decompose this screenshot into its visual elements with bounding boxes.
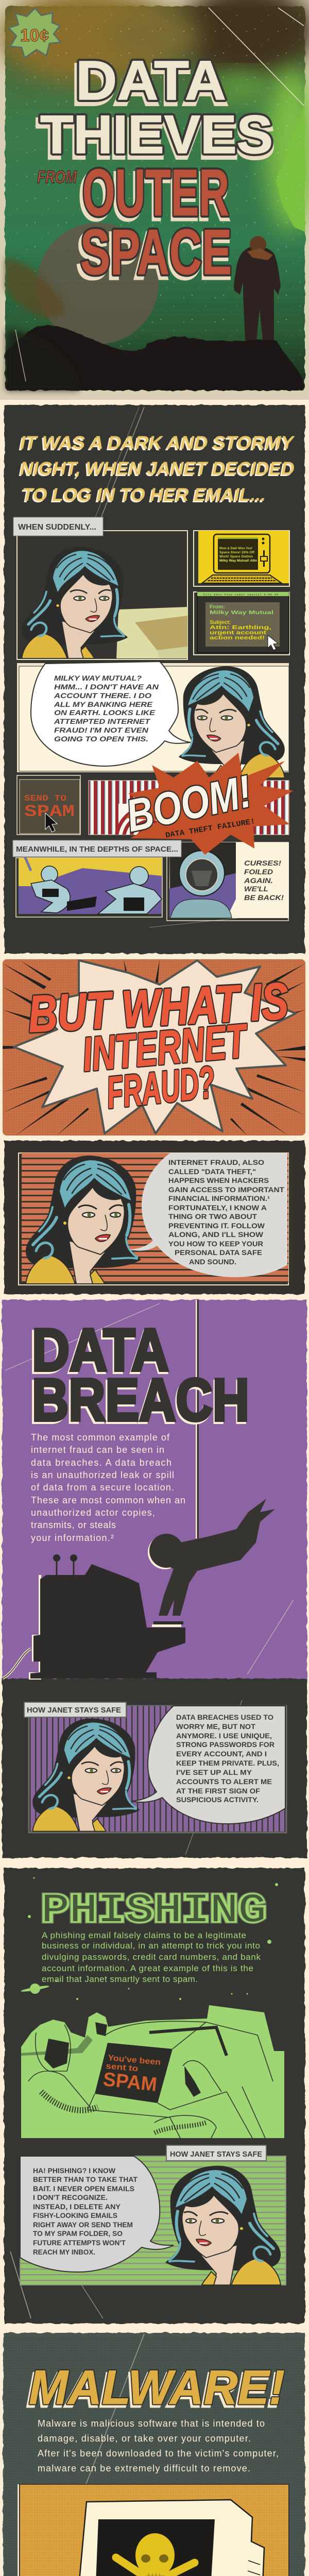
panel: stripes	[89, 780, 289, 835]
speech bubble: PERSONAL DATA SAFE	[175, 1248, 262, 1257]
caption: when suddenly: WHEN SUDDENLY...	[18, 523, 96, 532]
caption: when suddenly	[13, 517, 103, 536]
title: outer space: OUTER	[82, 156, 229, 230]
speech bubble: GAIN ACCESS TO IMPORTANT	[168, 1185, 284, 1194]
body text	[31, 1432, 185, 1543]
panel: janet speaks	[17, 662, 289, 778]
heading: phishing: PHISHING	[41, 1888, 266, 1934]
caption: meanwhile: MEANWHILE, IN THE DEPTHS OF SPACE...	[16, 845, 178, 854]
speech bubble: DATA BREACHES USED TO	[176, 1713, 273, 1721]
caption: how janet stays safe	[24, 1702, 126, 1717]
speech bubble: AT THE FIRST SIGN OF	[176, 1787, 260, 1795]
title: data thieves	[38, 49, 273, 169]
panel: data breach	[2, 1300, 307, 1858]
speech bubble: ALONG, AND I'LL SHOW	[168, 1230, 264, 1239]
speech bubble: INSTEAD, I DELETE ANY	[33, 2202, 121, 2211]
burst: speech shape	[14, 960, 296, 1133]
body text: internet fraud can be seen in	[31, 1445, 164, 1455]
speech bubble: SUSPICIOUS ACTIVITY.	[176, 1795, 259, 1804]
speech bubble: ANYMORE. I USE UNIQUE,	[176, 1732, 272, 1740]
planet	[37, 223, 159, 344]
body text	[38, 2418, 279, 2473]
heading: dark and stormy: NIGHT, WHEN JANET DECIDED	[20, 459, 295, 479]
panel: email message: File Edit View Label Special 6:05 PM	[203, 594, 278, 597]
speech bubble: INTERNET FRAUD, ALSO	[168, 1158, 264, 1166]
heading: phishing: PHISHING	[41, 1888, 266, 1934]
speech bubble: REACH MY INBOX.	[33, 2248, 95, 2256]
panel: inbox monitor: Space Store! 20% Off	[219, 551, 255, 554]
body text: damage, disable, or take over your computer.	[38, 2433, 251, 2444]
body text: The most common example of	[31, 1432, 170, 1443]
panel: send to spam	[17, 775, 80, 835]
speech bubble: MILKY WAY MUTUAL?	[54, 674, 142, 682]
heading: data breach: DATA	[30, 1318, 168, 1385]
title: outer space: SPACE	[80, 217, 232, 288]
body text: After it's been downloaded to the victim's computer,	[38, 2448, 279, 2459]
heading: data breach: BREACH	[32, 1366, 249, 1433]
speech bubble: GOING TO OPEN THIS.	[54, 735, 148, 743]
speech bubble: WORRY ME, BUT NOT	[176, 1722, 255, 1731]
body text: data breaches. A data breach	[31, 1458, 171, 1468]
speech bubble: HMM... I DON'T HAVE AN	[54, 683, 159, 691]
panel: send to spam: SEND TO	[24, 794, 66, 804]
speech bubble: FRAUD! I'M NOT EVEN	[54, 726, 149, 734]
panel: email message: Milky Way Mutual	[210, 609, 273, 616]
body text: is an unauthorized leak or spill	[31, 1470, 174, 1480]
panel: cover	[0, 0, 309, 400]
panel: janet reads email	[17, 531, 187, 659]
burst: boom: BOOM!	[122, 766, 256, 841]
speech bubble: THING OR TWO ABOUT	[168, 1212, 257, 1221]
title: outer space: SPACE	[80, 217, 232, 288]
body text: These are most common when an	[31, 1495, 185, 1505]
monitor screen: You've been	[108, 2054, 161, 2067]
body text: of data from a secure location.	[31, 1482, 174, 1493]
speech bubble: KEEP THEM PRIVATE. PLUS,	[176, 1759, 279, 1767]
monitor screen: SPAM	[102, 2069, 158, 2096]
panel: story intro	[4, 405, 305, 954]
heading: dark and stormy	[19, 433, 295, 506]
monitor screen: sent to	[106, 2062, 139, 2073]
title: data thieves: DATA	[76, 49, 226, 111]
heading: but what is internet fraud: FRAUD?	[105, 1057, 217, 1118]
icon: computer machine	[3, 1554, 185, 1680]
panel: malware	[3, 2333, 305, 2576]
speech bubble: ACCOUNT THERE. I DO	[54, 691, 151, 700]
panel: janet on data breaches	[24, 1702, 286, 1833]
speech bubble: ATTEMPTED INTERNET	[54, 717, 151, 725]
monitor screen	[95, 2043, 173, 2103]
panel: inbox monitor	[194, 531, 289, 586]
panel: phishing	[4, 1868, 305, 2324]
icon: monitor	[76, 2500, 264, 2576]
speech bubble: I'VE SET UP ALL MY	[176, 1768, 252, 1776]
title: data thieves: DATA	[76, 49, 226, 111]
body text: email that Janet smartly sent to spam.	[42, 1974, 198, 1984]
heading: phishing: PHISHING	[41, 1888, 266, 1934]
speech bubble: FISHY-LOOKING EMAILS	[33, 2211, 117, 2219]
panel: curses: CURSES!	[244, 859, 281, 867]
panel: internet fraud explainer	[4, 1141, 305, 1294]
title: outer space: SPACE	[77, 221, 231, 292]
heading: but what is internet fraud: FRAUD?	[105, 1057, 217, 1118]
icon: saturn	[21, 1984, 49, 1994]
panel: curses	[167, 842, 289, 921]
body text: A phishing email falsely claims to be a legitimate	[42, 1930, 246, 1940]
body text: business or individual, in an attempt to trick you into	[42, 1941, 260, 1951]
body text: transmits, or steals	[31, 1520, 116, 1530]
speech bubble	[31, 662, 191, 766]
panel: email message: Subject:	[210, 619, 231, 625]
speech bubble: FINANCIAL INFORMATION.¹	[168, 1194, 270, 1202]
title: data thieves: THIEVES	[40, 105, 273, 165]
panel: email message: urgent account	[210, 630, 267, 636]
speech bubble	[131, 1706, 285, 1824]
astronaut helmet visor	[44, 2039, 69, 2069]
title: outer space: OUTER	[82, 156, 229, 230]
title: data thieves: DATA	[73, 53, 226, 115]
caption: meanwhile	[13, 840, 181, 857]
speech bubble: TO MY SPAM FOLDER, SO	[33, 2229, 123, 2238]
panel: email message: action needed!	[210, 635, 265, 641]
heading: dark and stormy: TO LOG IN TO HER EMAIL...	[21, 486, 264, 506]
body text: account information. A great example of this is the	[42, 1963, 253, 1973]
speech bubble: FORTUNATELY, I KNOW A	[168, 1204, 267, 1212]
panel: email message: From:	[210, 604, 225, 610]
panel: curses: BE BACK!	[244, 893, 284, 902]
speech bubble: RIGHT AWAY OR SEND THEM	[33, 2221, 133, 2229]
title: outer space: OUTER	[79, 160, 229, 233]
panel: email message	[194, 592, 289, 655]
icon: skull and crossbones	[116, 2533, 195, 2576]
laser line	[196, 1300, 199, 1538]
speech bubble: BETTER THAN TO TAKE THAT	[33, 2175, 138, 2183]
title: from: FROM	[37, 167, 77, 187]
panel: what is internet fraud	[3, 959, 305, 1136]
speech bubble: ALL MY BANKING HERE	[54, 700, 153, 708]
illustration: astronauts at terminal	[21, 2005, 284, 2138]
caption: how janet stays safe: HOW JANET STAYS SAFE	[170, 2150, 262, 2159]
panel: curses: FOILED	[244, 868, 273, 876]
heading: but what is internet fraud	[27, 972, 289, 1118]
speech bubble: EVERY ACCOUNT, AND I	[176, 1750, 267, 1758]
body text	[42, 1930, 261, 1984]
speech bubble: STRONG PASSWORDS FOR	[176, 1740, 274, 1749]
icon: envelope	[116, 607, 187, 658]
heading: dark and stormy: IT WAS A DARK AND STORMY	[20, 433, 295, 453]
caption: how janet stays safe: HOW JANET STAYS SAFE	[27, 1706, 121, 1715]
speech bubble	[129, 1153, 287, 1277]
speech bubble: HAPPENS WHEN HACKERS	[168, 1176, 269, 1184]
panel: curses: AGAIN.	[244, 876, 273, 885]
panel: inbox monitor: Work! Space Station	[219, 555, 253, 558]
speech bubble: BAIT. I NEVER OPEN EMAILS	[33, 2184, 134, 2193]
heading: dark and stormy: IT WAS A DARK AND STORMY	[19, 434, 294, 454]
body text: unauthorized actor copies,	[31, 1507, 155, 1518]
body text: divulging passwords, credit card numbers, and bank	[42, 1952, 261, 1962]
speech bubble: CALLED "DATA THEFT,"	[168, 1167, 256, 1176]
title: data thieves: THIEVES	[40, 105, 273, 165]
panel: astronauts	[16, 856, 162, 917]
body text: your information.²	[31, 1533, 114, 1543]
panel: email message: Attn: Earthling,	[210, 624, 271, 631]
heading: data breach: BREACH	[30, 1368, 248, 1435]
heading: data breach	[30, 1316, 249, 1435]
heading: dark and stormy: NIGHT, WHEN JANET DECIDED	[19, 460, 293, 480]
panel: janet on phishing	[20, 2145, 286, 2285]
speech bubble: ACCOUNTS TO ALERT ME	[176, 1777, 272, 1786]
heading: data breach: DATA	[32, 1316, 169, 1383]
heading: malware: MALWARE!	[29, 2360, 285, 2414]
speech bubble: FUTURE ATTEMPTS WON'T	[33, 2239, 126, 2247]
illustration: infected computer	[18, 2484, 289, 2576]
icon: diving astronaut	[148, 1499, 275, 1616]
speech bubble: PREVENTING IT. FOLLOW	[168, 1222, 265, 1230]
heading: dark and stormy: TO LOG IN TO HER EMAIL...	[22, 485, 266, 505]
panel: inbox monitor: Mom & Dad! Miss You!	[219, 547, 252, 550]
heading: malware: MALWARE!	[27, 2363, 283, 2417]
speech bubble: AND SOUND.	[189, 1258, 236, 1266]
price badge	[9, 8, 61, 58]
caption: how janet stays safe	[166, 2145, 266, 2161]
speech bubble	[20, 2156, 174, 2272]
speech bubble: I DON'T RECOGNIZE.	[33, 2193, 108, 2201]
speech bubble: ON EARTH. LOOKS LIKE	[54, 708, 156, 717]
heading: malware: MALWARE!	[29, 2360, 285, 2414]
speech bubble: YOU HOW TO KEEP YOUR	[168, 1240, 263, 1248]
panel: inbox monitor: Milky Way Mutual! Attn	[219, 559, 257, 563]
burst: boom: DATA THEFT FAILURE!	[165, 817, 256, 840]
title: data thieves: THIEVES	[38, 109, 273, 169]
panel: curses: WE'LL	[244, 885, 268, 893]
panel: send to spam: SPAM	[24, 802, 75, 821]
icon: astronaut	[234, 236, 281, 340]
body text: Malware is malicious software that is intended to	[38, 2418, 265, 2429]
title: outer space	[77, 156, 232, 292]
price badge: 10¢	[20, 26, 49, 45]
dark ground	[6, 326, 304, 391]
speech bubble: HA! PHISHING? I KNOW	[33, 2166, 116, 2175]
body text: malware can be extremely difficult to remove.	[38, 2463, 250, 2473]
